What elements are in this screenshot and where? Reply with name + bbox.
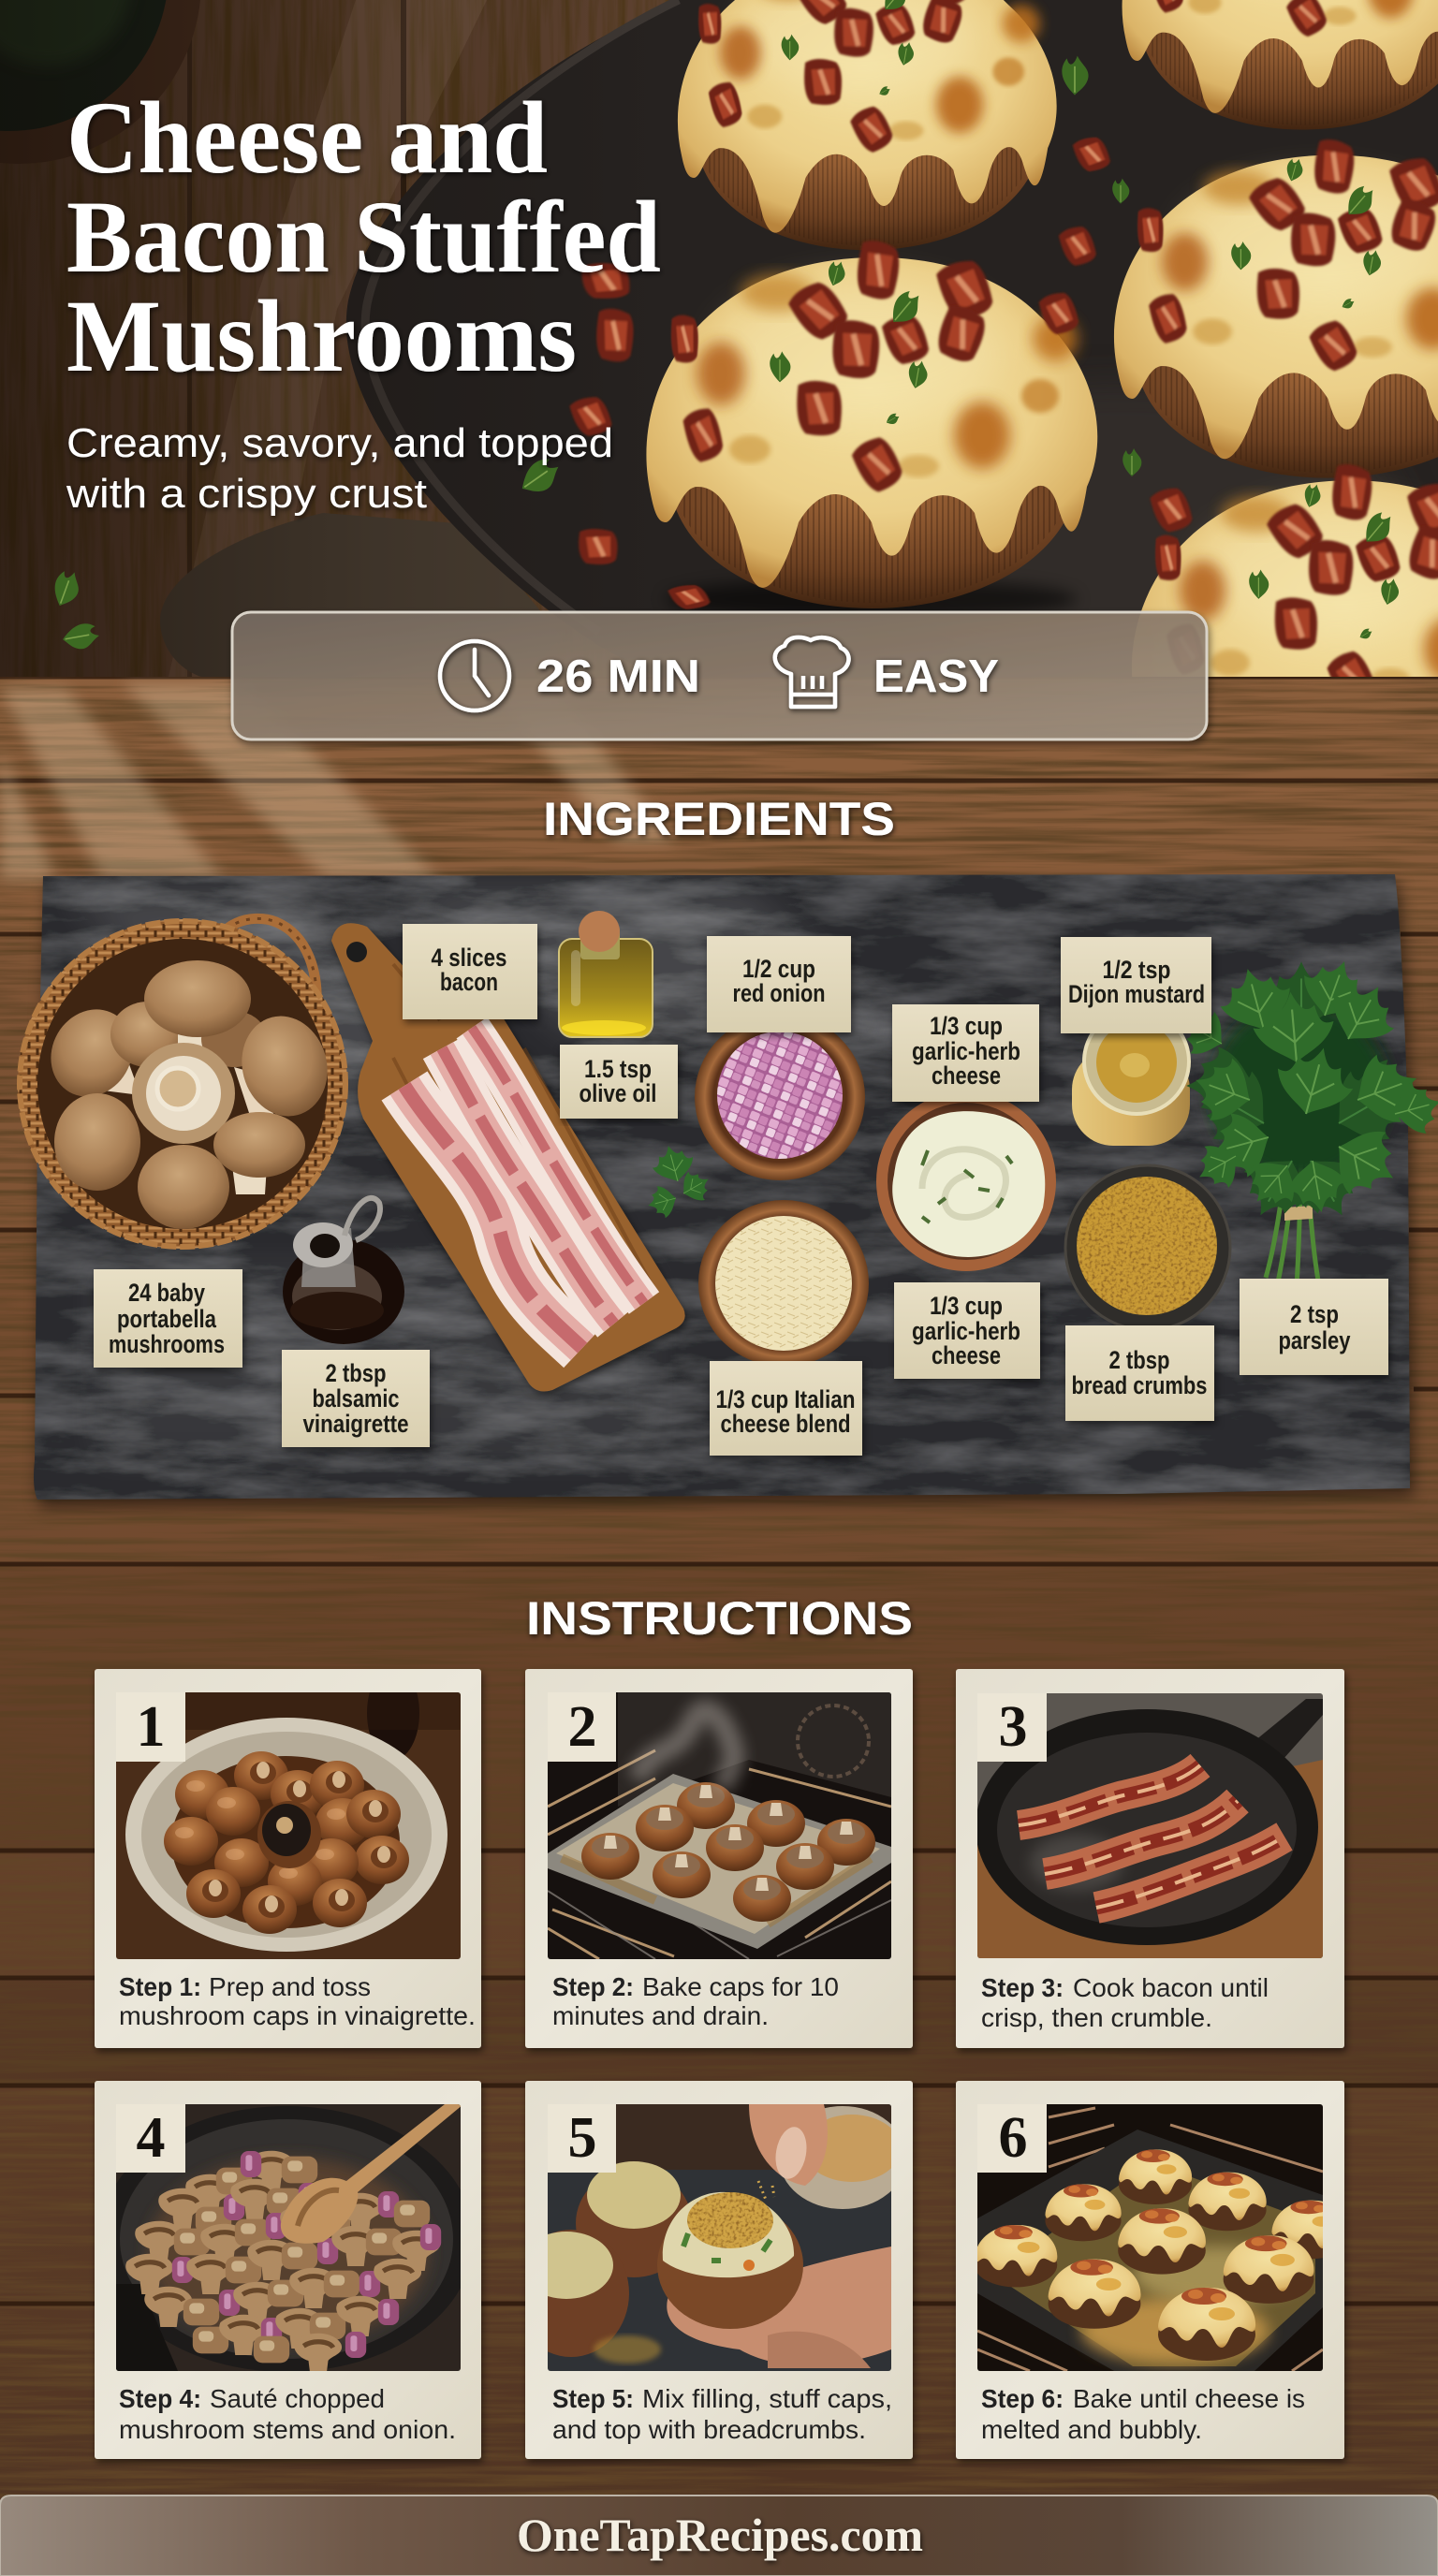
- number badge 2: [548, 1692, 616, 1762]
- hero: dark plate: [346, 0, 1438, 677]
- label: balsamic vinaigrette: balsamic: [313, 1384, 399, 1412]
- label: bread crumbs: bread crumbs: [1071, 1371, 1208, 1399]
- label: dijon mustard: [1061, 937, 1211, 1033]
- step 4 text: Step 4:: [119, 2384, 201, 2413]
- panel: step 2 card: [525, 1669, 913, 2048]
- label: red onion: [707, 936, 851, 1032]
- title: Mushrooms: [66, 279, 577, 393]
- time text: 26 MIN: [536, 651, 700, 702]
- step 1 text: Step 1:: [119, 1972, 201, 2001]
- step 2 text: Bake caps for 10: [642, 1972, 839, 2001]
- label: garlic herb cheese top: [892, 1004, 1039, 1102]
- step 1 photo: [116, 1666, 461, 1959]
- step 6 text: [981, 2384, 1305, 2444]
- ingredient: bacon slices: [404, 1028, 644, 1348]
- label: balsamic vinaigrette: 2 tbsp: [326, 1359, 386, 1387]
- step 4 photo: [99, 2104, 474, 2374]
- label: Italian cheese blend: [710, 1361, 862, 1456]
- footer website text: OneTapRecipes.com: [517, 2509, 923, 2561]
- panel: step 3 card: [956, 1669, 1344, 2048]
- icon: chef hat: [775, 637, 849, 707]
- step 5 text: Mix filling, stuff caps,: [642, 2384, 892, 2413]
- hero: stuffed mushroom top right: [1123, 0, 1438, 130]
- label: red onion: red onion: [732, 979, 826, 1007]
- step 3 text: [981, 1973, 1269, 2032]
- label: olive oil: [560, 1045, 678, 1119]
- ingredient: balsamic vinaigrette bottle: [283, 1198, 404, 1344]
- ingredient: bread crumbs bowl: [1065, 1165, 1230, 1330]
- step 4 text: [119, 2384, 456, 2444]
- number badge 6: [977, 2104, 1047, 2173]
- label: balsamic vinaigrette: [282, 1350, 430, 1447]
- step 6 text: Step 6:: [981, 2384, 1064, 2413]
- label: garlic herb cheese top: 1/3 cup: [930, 1012, 1003, 1040]
- label: garlic herb cheese bottom: cheese: [932, 1341, 1001, 1369]
- ingredient: dijon mustard jar: [1072, 1009, 1190, 1146]
- hero: linen napkin: [160, 513, 562, 677]
- panel: step 5 card: [513, 2081, 913, 2459]
- ingredient: olive oil bottle: [559, 911, 653, 1037]
- title: Cheese and: [66, 80, 548, 195]
- label: garlic herb cheese top: garlic-herb: [912, 1037, 1020, 1065]
- label: baby portabella: [94, 1269, 242, 1368]
- label: bacon: bacon: [440, 968, 498, 996]
- panel: step 4 card: [95, 2081, 481, 2459]
- title: [66, 80, 661, 393]
- number badge 5: [548, 2104, 616, 2173]
- step 6 text: melted and bubbly.: [981, 2415, 1202, 2444]
- panel: step 1 card: [95, 1666, 481, 2048]
- label: garlic herb cheese bottom: [894, 1282, 1040, 1379]
- footer bar: [0, 2496, 1438, 2576]
- number badge 4: [116, 2104, 185, 2173]
- hero: scattered bacon and herbs: [49, 56, 1192, 651]
- step 3 text: Cook bacon until: [1073, 1973, 1269, 2002]
- step 6 text: Bake until cheese is: [1073, 2384, 1305, 2413]
- step 2 text: Step 2:: [552, 1972, 634, 2001]
- ingredient: basket of mushrooms: [18, 918, 347, 1249]
- hero: stuffed mushroom right: [1114, 130, 1438, 478]
- step 3 photo: [976, 1693, 1323, 1958]
- number badge 3: 3: [998, 1695, 1028, 1759]
- label: bread crumbs: 2 tbsp: [1108, 1346, 1170, 1374]
- number badge 4: 4: [137, 2106, 165, 2170]
- hero: bowl of herbs: [0, 0, 201, 164]
- step 5 text: and top with breadcrumbs.: [552, 2415, 866, 2444]
- ingredient: parsley sprig: [644, 1140, 716, 1222]
- step 4 text: Sauté chopped: [210, 2384, 385, 2413]
- title: Bacon Stuffed: [66, 180, 661, 294]
- label: Italian cheese blend: 1/3 cup Italian: [715, 1385, 856, 1413]
- panel: step 6 card: [956, 2081, 1350, 2459]
- label: parsley: 2 tsp: [1290, 1300, 1339, 1328]
- label: olive oil: olive oil: [579, 1079, 657, 1107]
- heading: instructions: INSTRUCTIONS: [526, 1592, 913, 1645]
- mushroom pieces: [36, 960, 338, 1229]
- label: dijon mustard: 1/2 tsp: [1103, 956, 1170, 984]
- step 5 text: [552, 2384, 892, 2444]
- ingredient: cutting board: [331, 923, 685, 1391]
- step 3 text: Step 3:: [981, 1973, 1064, 2002]
- ingredient: Italian cheese bowl: [698, 1200, 869, 1367]
- label: parsley: [1240, 1279, 1388, 1375]
- ingredient: parsley bunch: [1173, 950, 1438, 1288]
- step 6 photo: [975, 2104, 1350, 2371]
- number badge 3: [977, 1693, 1047, 1762]
- hero: stuffed mushroom back: [678, 0, 1057, 250]
- label: dijon mustard: Dijon mustard: [1068, 980, 1205, 1008]
- step 5 text: Step 5:: [552, 2384, 634, 2413]
- difficulty text: EASY: [873, 651, 999, 702]
- number badge 1: 1: [137, 1695, 165, 1759]
- subtitle: with a crispy crust: [66, 471, 427, 517]
- hero: main stuffed mushroom: [646, 231, 1097, 608]
- number badge 6: 6: [998, 2106, 1028, 2170]
- step 1 text: Prep and toss: [209, 1972, 371, 2001]
- label: bacon: [403, 924, 537, 1019]
- number badge 1: [116, 1692, 185, 1762]
- number badge 2: 2: [567, 1695, 597, 1759]
- step 3 text: crisp, then crumble.: [981, 2003, 1212, 2032]
- step 4 text: mushroom stems and onion.: [119, 2415, 456, 2444]
- ingredient: red onion bowl: [695, 1014, 865, 1180]
- label: bread crumbs: [1065, 1325, 1214, 1421]
- panel: slate board: [34, 874, 1414, 1507]
- icon: clock: [440, 641, 509, 710]
- subtitle: Creamy, savory, and topped: [66, 420, 613, 466]
- step 2 photo: [548, 1692, 891, 1959]
- hero: stuffed mushroom bottom right: [1132, 463, 1438, 677]
- label: garlic herb cheese bottom: 1/3 cup: [930, 1292, 1003, 1320]
- label: garlic herb cheese bottom: garlic-herb: [912, 1317, 1020, 1345]
- label: olive oil: 1.5 tsp: [584, 1055, 652, 1083]
- label: parsley: parsley: [1279, 1326, 1350, 1354]
- step 5 photo: [513, 2104, 906, 2371]
- label: baby portabella: portabella: [117, 1305, 217, 1333]
- ingredient: garlic herb cheese bowl: [876, 1091, 1056, 1271]
- step 2 text: [552, 1972, 839, 2030]
- subtitle: [66, 420, 613, 517]
- label: baby portabella: 24 baby: [128, 1279, 205, 1307]
- step 1 text: [119, 1972, 476, 2030]
- label: baby portabella: mushrooms: [109, 1330, 225, 1358]
- time and difficulty bar: [232, 612, 1207, 739]
- step 2 text: minutes and drain.: [552, 2001, 769, 2030]
- label: balsamic vinaigrette: vinaigrette: [303, 1410, 408, 1438]
- label: red onion: 1/2 cup: [742, 955, 815, 983]
- number badge 5: 5: [567, 2106, 597, 2170]
- label: Italian cheese blend: cheese blend: [721, 1410, 850, 1438]
- label: garlic herb cheese top: cheese: [932, 1061, 1001, 1090]
- label: bacon: 4 slices: [431, 944, 507, 972]
- heading: ingredients: INGREDIENTS: [543, 793, 895, 845]
- hero photo: [0, 0, 1438, 677]
- step 1 text: mushroom caps in vinaigrette.: [119, 2001, 476, 2030]
